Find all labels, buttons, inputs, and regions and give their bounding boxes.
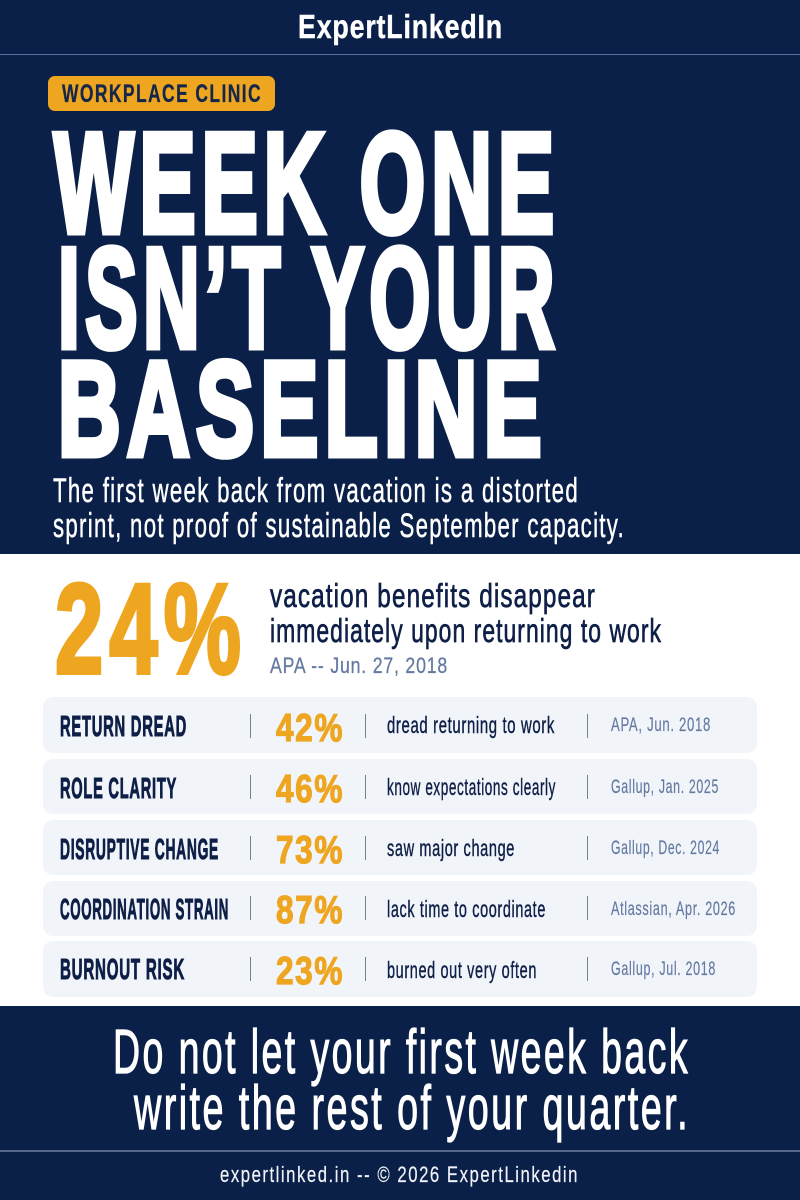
badge: workplace clinic: [48, 76, 275, 111]
row: role clarity: Gallup, Jan. 2025: [611, 777, 719, 798]
statistic source: APA -- Jun. 27, 2018: [270, 653, 448, 678]
panel: statistics table: [43, 697, 757, 997]
panel: closing banner and footer: [0, 1006, 800, 1200]
row: role clarity: know expectations clearly: [387, 774, 556, 800]
row: return dread: 42%: [276, 707, 344, 750]
row: coordination strain: Atlassian, Apr. 2026: [611, 899, 736, 920]
subtitle: [53, 472, 625, 545]
row: burnout risk: BURNOUT RISK: [60, 954, 185, 986]
badge: workplace clinic: WORKPLACE CLINIC: [62, 80, 262, 108]
statistic description: [270, 577, 662, 649]
row: burnout risk: Gallup, Jul. 2018: [611, 959, 716, 980]
title: BASELINE: [58, 335, 548, 484]
row: return dread: APA, Jun. 2018: [611, 715, 711, 736]
row: role clarity: 46%: [276, 768, 344, 811]
row: return dread: RETURN DREAD: [60, 711, 187, 743]
row: coordination strain: COORDINATION STRAIN: [60, 894, 229, 926]
row: burnout risk: burned out very often: [387, 957, 537, 983]
big number: 24%: [55, 558, 247, 701]
panel: headline statistic: [55, 558, 662, 701]
row: disruptive change: DISRUPTIVE CHANGE: [60, 834, 219, 866]
statistic description: vacation benefits disappear: [270, 577, 596, 614]
row: disruptive change: 73%: [276, 829, 344, 872]
title: [54, 104, 560, 484]
row: disruptive change: [43, 820, 757, 875]
row: disruptive change: saw major change: [387, 835, 515, 861]
row: return dread: [43, 697, 757, 753]
row: role clarity: [43, 759, 757, 814]
panel: hero header: [0, 0, 800, 554]
row: burnout risk: 23%: [276, 950, 344, 993]
footer credit: expertlinked.in -- © 2026 ExpertLinkedin: [220, 1162, 579, 1187]
row: role clarity: ROLE CLARITY: [60, 773, 177, 805]
row: burnout risk: [43, 941, 757, 997]
row: return dread: dread returning to work: [387, 712, 555, 738]
brand name: ExpertLinkedIn: [298, 8, 503, 45]
row: coordination strain: 87%: [276, 889, 344, 932]
row: coordination strain: [43, 881, 757, 936]
closing message: [113, 1018, 690, 1143]
row: coordination strain: lack time to coordinate: [387, 896, 546, 922]
row: disruptive change: Gallup, Dec. 2024: [611, 838, 720, 859]
